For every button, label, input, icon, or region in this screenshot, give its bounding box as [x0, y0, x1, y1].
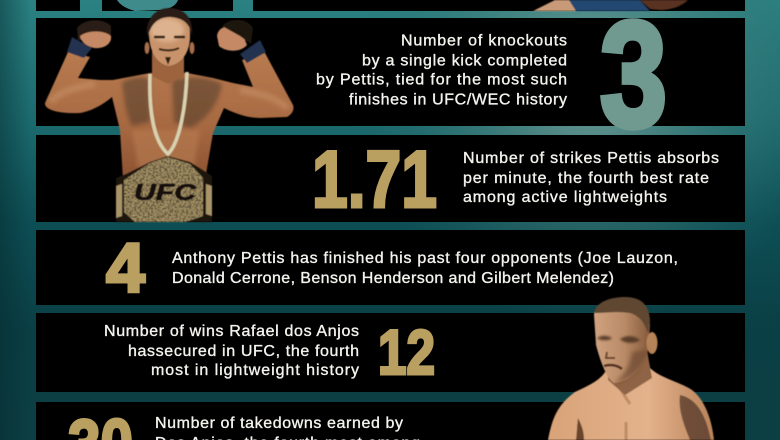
neck and head — [152, 50, 184, 84]
text: wins description — [104, 323, 359, 379]
panel: takedowns — [36, 402, 745, 440]
championship belt — [116, 156, 212, 222]
text: knockouts description: by a single kick completed — [362, 52, 567, 70]
hair — [148, 8, 192, 36]
big number 1.71: 1.71 — [312, 135, 437, 225]
panel: strikes absorbed — [36, 135, 745, 225]
chain necklace — [150, 72, 187, 154]
big number 12: 12 — [378, 318, 435, 388]
tattoos — [122, 77, 222, 128]
text: knockouts description: by Pettis, tied for the most such — [316, 72, 567, 88]
panel: knockouts — [36, 0, 745, 158]
text: knockouts description: finishes in UFC/WEC history — [349, 92, 567, 108]
text: strikes description: per minute, the fourth best rate — [463, 170, 709, 187]
text: knockouts description — [316, 32, 567, 108]
figure: Anthony Pettis with belt — [45, 8, 293, 222]
panel: four finishes — [36, 229, 745, 307]
text: finishes description — [172, 250, 678, 287]
arms and torso — [45, 52, 293, 180]
text: wins description: most in lightweight history — [151, 362, 359, 379]
text: strikes description: among active lightweights — [463, 189, 667, 206]
chest and armpit shading — [618, 385, 630, 440]
text: finishes description: Anthony Pettis has finished his past four opponents (Joe Lauzon, — [172, 250, 678, 267]
text: finishes description: Donald Cerrone, Benson Henderson and Gilbert Melendez) — [172, 270, 614, 287]
torso — [548, 368, 714, 440]
text: takedowns description — [155, 415, 420, 440]
hair — [594, 297, 650, 333]
eye sockets, nose and mouth — [597, 336, 640, 343]
text: wins description: Number of wins Rafael dos Anjos — [104, 323, 359, 340]
neck and head — [608, 345, 652, 395]
arm tattoo — [680, 395, 711, 440]
eyes, mouth and goatee — [154, 36, 185, 38]
panel: top stat (cropped) — [36, 0, 745, 11]
gloves and fists — [77, 20, 111, 40]
panel: UFC wins — [36, 313, 745, 392]
text: knockouts description: Number of knockouts — [401, 32, 567, 50]
figure: Rafael dos Anjos — [548, 297, 714, 440]
wrist wraps — [67, 37, 92, 58]
text: strikes description: Number of strikes Pettis absorbs — [463, 150, 719, 167]
text: takedowns description: Number of takedowns earned by — [155, 415, 403, 432]
text: wins description: hassecured in UFC, the fourth — [128, 343, 359, 360]
top fighter fragment — [533, 0, 688, 11]
arm highlights — [50, 84, 288, 108]
big number 4: 4 — [106, 229, 145, 307]
abs highlight — [132, 130, 200, 168]
text: strikes description — [463, 150, 719, 206]
belt lettering: UFC — [134, 179, 196, 205]
